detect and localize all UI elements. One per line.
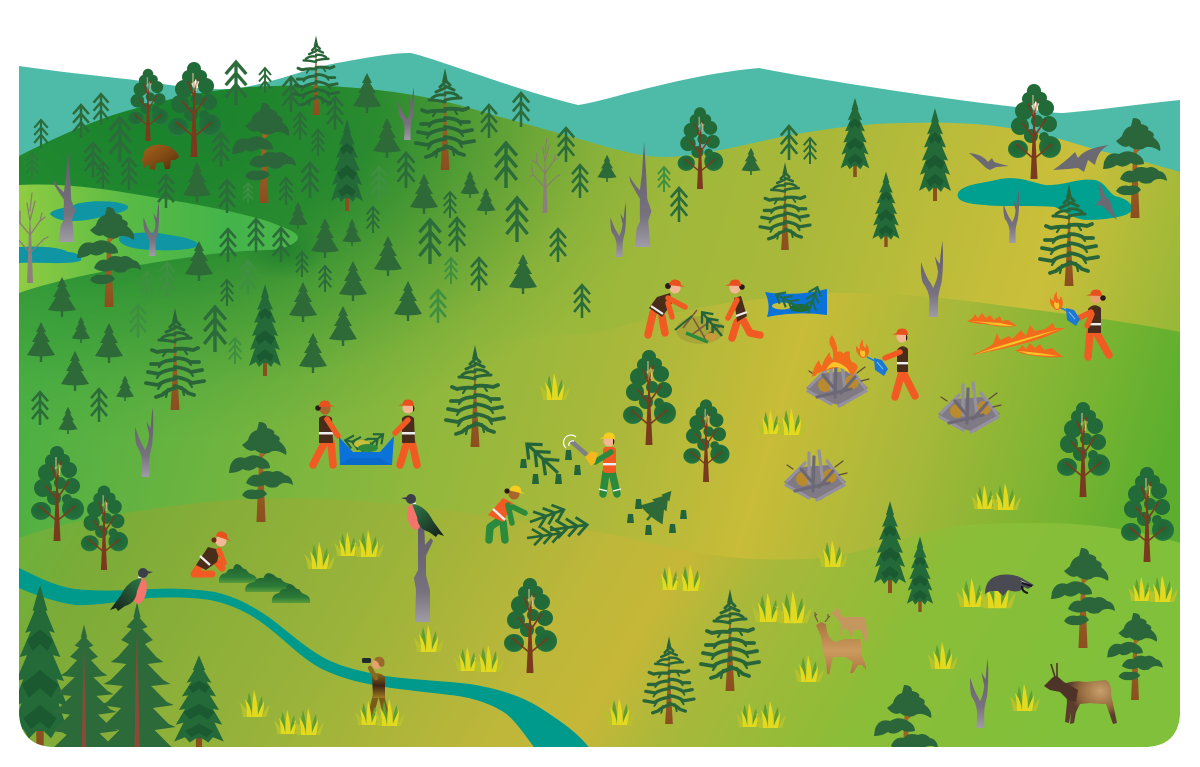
worker with chainsaw — [564, 432, 621, 494]
young line pines on the hillside — [26, 62, 816, 425]
background: teal mountains — [19, 53, 1180, 172]
tall snag with perched bird — [401, 494, 444, 622]
worker bending over pile — [648, 279, 686, 335]
woodpile being stacked — [675, 307, 728, 344]
felled solid fir with stumps — [627, 490, 687, 535]
bats — [969, 145, 1117, 220]
grass tufts — [239, 373, 1178, 735]
dead standing snags — [53, 87, 1019, 728]
feathered pines — [146, 35, 1098, 724]
lower foreground meadow — [19, 498, 1180, 750]
cut pines on the ground — [526, 502, 588, 546]
doe — [831, 607, 868, 642]
bird perched on the conifer — [110, 568, 153, 611]
kneeling planter — [194, 530, 233, 574]
buck — [815, 612, 866, 675]
badger — [985, 575, 1034, 596]
dense spruces — [249, 98, 951, 612]
crouching worker — [488, 484, 527, 540]
background: middle hillside — [19, 293, 1180, 750]
blue tarp carried with branches — [339, 433, 394, 465]
person: carrying tarp, left — [313, 400, 338, 465]
brown bear — [142, 145, 179, 170]
planted shrubs — [219, 564, 310, 603]
ponds in the meadow — [19, 201, 199, 263]
worker kneeling at pile — [725, 280, 760, 338]
worker lighting fire line — [1050, 290, 1109, 357]
lake on the right — [958, 178, 1132, 220]
elk — [1044, 663, 1117, 724]
felled pine with stumps — [520, 442, 581, 484]
flat blue tarp with branches — [765, 285, 827, 317]
person: carrying tarp, right — [395, 400, 417, 465]
background: bright meadow with ponds — [19, 185, 298, 293]
bare trees — [12, 138, 560, 283]
small solid firs on the hillside — [27, 73, 761, 434]
broadleaf trees — [31, 62, 1174, 673]
foreground conifers — [10, 585, 224, 755]
worker with drip torch at pile — [856, 328, 915, 397]
shadow under meadow tip — [262, 237, 314, 270]
unburned brush piles — [784, 383, 1001, 500]
river — [19, 568, 591, 750]
fire lines on the ground — [967, 313, 1065, 357]
burning pile — [806, 335, 869, 406]
Scots pines — [77, 103, 1167, 767]
birdwatcher with binoculars — [355, 657, 405, 726]
shading on the forested slope — [19, 86, 636, 392]
